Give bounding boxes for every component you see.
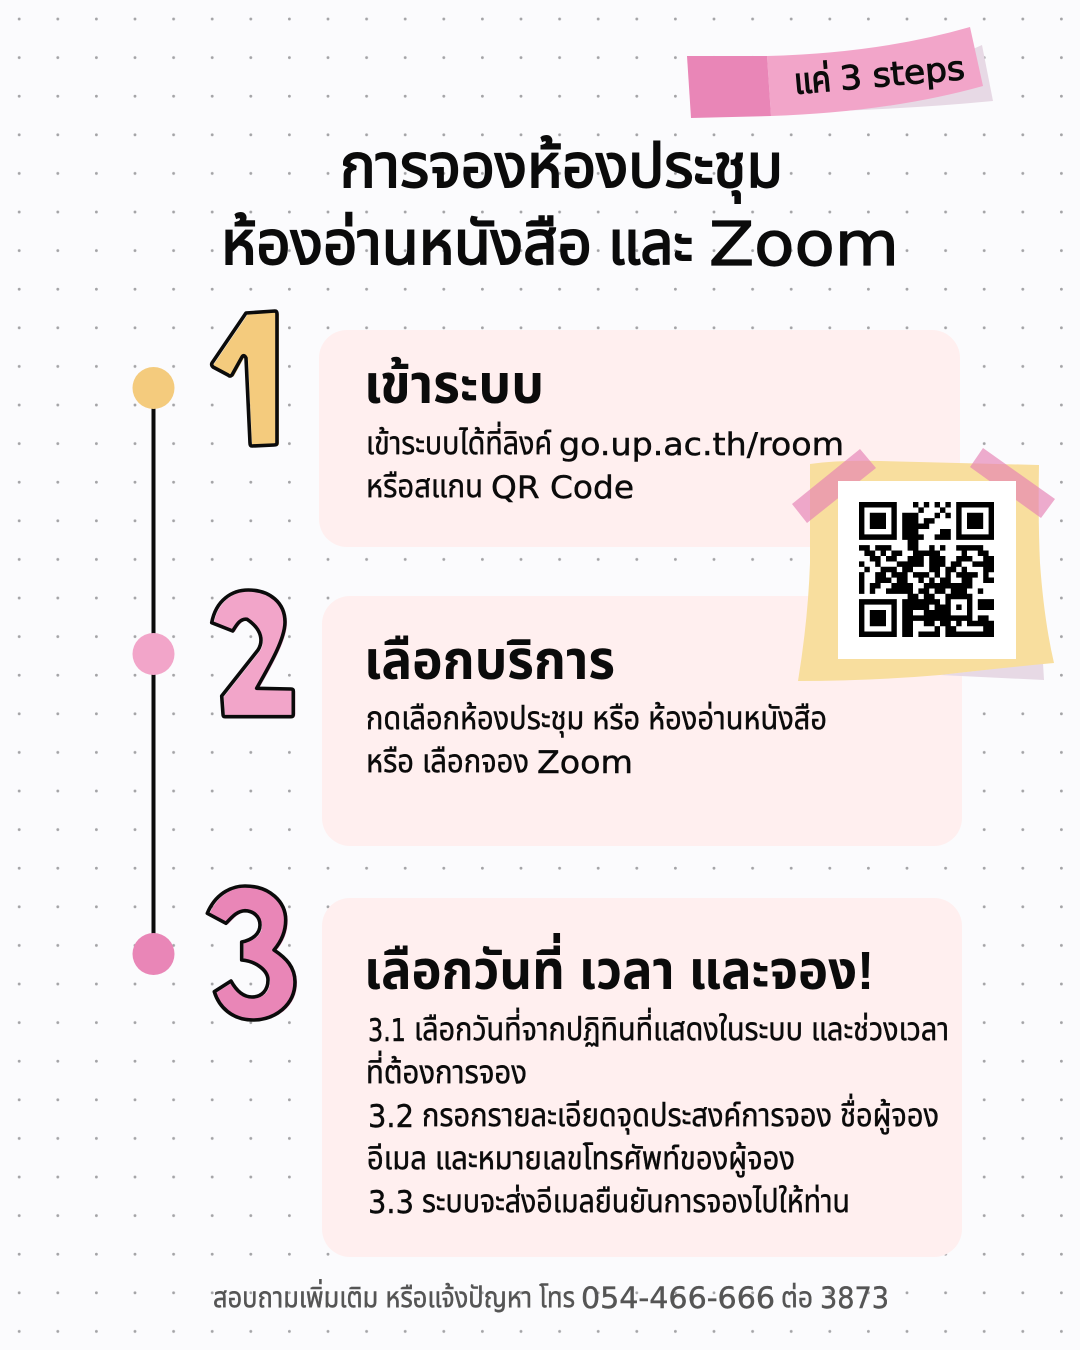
panel: step 1: QR Code xyxy=(491,470,634,506)
number 2 xyxy=(212,590,295,718)
footer contact: ต่อ xyxy=(781,1282,813,1314)
banner: only 3 steps: 3 steps xyxy=(838,48,966,98)
footer contact: 054-466-666 xyxy=(581,1281,775,1315)
panel: step 2: Zoom xyxy=(537,745,633,781)
title: ห้องอ่านหนังสือ xyxy=(221,209,592,277)
panel: step 3: 3.2 xyxy=(368,1099,414,1135)
QR code note xyxy=(792,448,1055,681)
banner: only 3 steps: แค่ xyxy=(792,58,833,102)
number 1 xyxy=(212,311,279,447)
title xyxy=(221,132,899,280)
panel: step 3: ระบบจะส่งอีเมลยืนยันการจองไปให้ท่าน xyxy=(422,1183,850,1219)
timeline xyxy=(132,367,174,975)
title: Zoom xyxy=(709,209,899,280)
panel: step 1: เข้าระบบได้ที่ลิงค์ xyxy=(366,421,552,461)
panel: step 2: เลือกบริการ xyxy=(364,631,615,691)
banner: only 3 steps xyxy=(687,27,993,118)
QR code xyxy=(859,505,994,634)
footer contact: สอบถามเพิ่มเติม หรือแจ้งปัญหา โทร xyxy=(213,1279,575,1314)
panel: step 2: กดเลือกห้องประชุม หรือ ห้องอ่านหนังสือ xyxy=(366,700,827,737)
panel: step 3: 3.3 xyxy=(368,1185,414,1221)
footer contact: 3873 xyxy=(820,1281,889,1315)
panel: step 3: เลือกวันที่ เวลา และจอง! xyxy=(364,933,874,1001)
panel: step 3: กรอกรายละเอียดจุดประสงค์การจอง ชื่อผู้จอง xyxy=(422,1093,939,1135)
panel: step 1: เข้าระบบ xyxy=(364,355,544,415)
panel: step 1: go.up.ac.th/room xyxy=(559,427,844,463)
panel: step 3: อีเมล และหมายเลขโทรศัพท์ของผู้จอง xyxy=(367,1140,795,1178)
panel: step 1: หรือสแกน xyxy=(366,468,483,504)
panel: step 2: หรือ เลือกจอง xyxy=(366,743,529,779)
panel: step 1 xyxy=(319,330,960,547)
footer contact xyxy=(213,1279,889,1315)
tape left xyxy=(792,449,876,523)
QR white card xyxy=(838,481,1016,659)
tape right xyxy=(970,448,1055,518)
panel: step 2 xyxy=(322,596,962,846)
number 3 xyxy=(207,886,297,1021)
panel: step 3 xyxy=(322,898,962,1257)
panel: step 3: เลือกวันที่จากปฏิทินที่แสดงในระบบ และช่วงเวลา xyxy=(414,1007,949,1047)
panel: step 3: 3.1 xyxy=(368,1013,406,1049)
title: และ xyxy=(608,209,693,277)
panel: step 3: ที่ต้องการจอง xyxy=(366,1050,527,1090)
title: การจองห้องประชุม xyxy=(340,132,783,203)
